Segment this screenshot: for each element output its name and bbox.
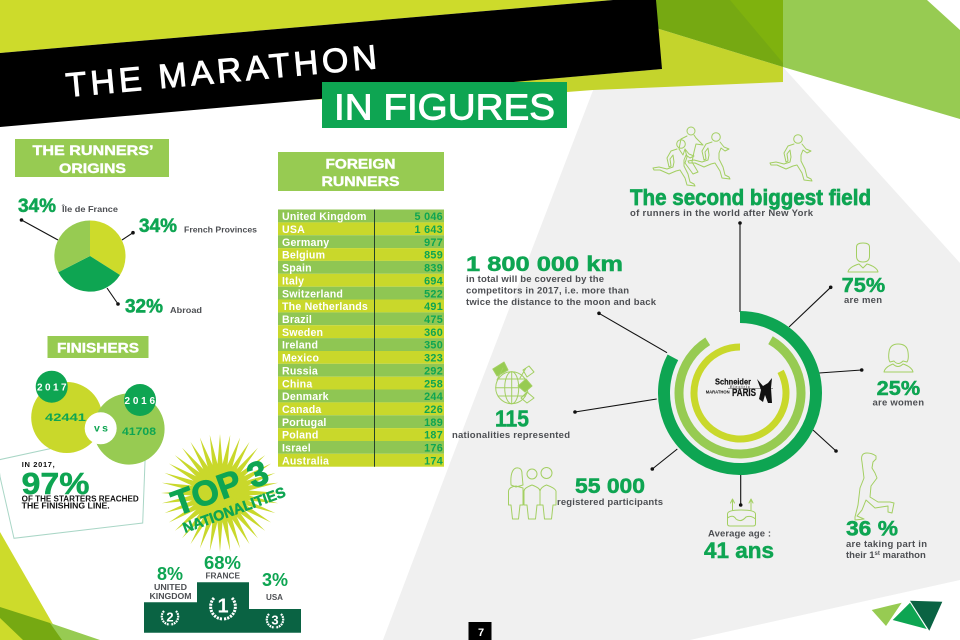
table: foreign runners by country: 323 [424,353,443,365]
table: foreign runners by country: 5 046 [414,211,443,223]
finishers comparison circles: vs [94,423,108,435]
heading: the second biggest field: of runners in the world after New York [630,208,814,219]
stat: men: are men [844,295,882,306]
stat: distance: in total will be covered by the [466,274,604,285]
pie label: ile de france [18,196,118,240]
table: foreign runners by country: 189 [424,417,443,429]
table: foreign runners by country: Australia [282,455,329,467]
podium label: usa: USA [266,593,283,602]
table: foreign runners by country: 176 [424,443,443,455]
title: the marathon: THE MARATHON [64,38,378,105]
table: foreign runners by country: 1 643 [414,224,443,236]
heading: the second biggest field [630,185,871,219]
stat: distance [466,253,657,308]
badge text: nationalities: NATIONALITIES [181,485,288,537]
table: foreign runners by country: The Netherlands [282,301,368,313]
stat: 97 percent finishers: IN 2017, [22,460,55,469]
pie label: abroad: Abroad [170,305,202,315]
table: foreign runners by country: 226 [424,404,443,416]
pie label: ile de france: Île de France [61,203,118,214]
finishers comparison circles [31,371,165,465]
icon: female runner [855,453,894,520]
bottom-left decorative shapes [0,532,100,640]
heading: foreign runners: RUNNERS [322,174,400,189]
stat: nationalities [452,406,570,441]
table: foreign runners by country: Denmark [282,391,329,403]
icon: birthday cake [728,499,756,526]
marathon logo [706,377,773,403]
top decorative shapes [0,0,960,119]
stat: nationalities: 115 [495,406,529,432]
table: foreign runners by country: 522 [424,288,443,300]
stat: first marathon: their 1 [846,550,875,561]
table: foreign runners by country: 174 [424,455,443,467]
table: foreign runners by country [278,210,444,467]
pie label: french provinces: French Provinces [184,224,257,234]
table: foreign runners by country: Ireland [282,340,318,352]
table: foreign runners by country: Sweden [282,327,323,339]
podium [144,582,301,633]
table: foreign runners by country: USA [282,224,305,236]
stat: women [872,378,924,409]
stat: women: 25% [877,378,920,400]
heading: the second biggest field: The second biggest field [630,185,871,210]
stat: average age: Average age : [708,529,771,540]
table: foreign runners by country: 694 [424,275,443,287]
pie label: french provinces [122,216,257,240]
table: foreign runners by country: 475 [424,314,443,326]
corner logo triangles [872,601,942,631]
heading: the runners' origins: ORIGINS [59,161,126,176]
stat: 97 percent finishers: OF THE STARTERS REACHED [22,495,139,504]
stat: first marathon: 36 % [846,518,898,541]
page number: 7 [478,627,484,639]
table: foreign runners by country: Italy [282,275,304,287]
stat: participants: 55 000 [575,475,645,498]
stat: first marathon: are taking part in [846,539,927,550]
stat: 97 percent finishers: 97% [22,466,90,501]
table: foreign runners by country: Canada [282,404,321,416]
stat: first marathon: marathon [880,550,926,561]
icon: man [848,243,878,272]
stat: men [842,275,885,306]
page number [468,622,492,640]
table: foreign runners by country: Mexico [282,353,319,365]
icon: group of runners [653,127,730,186]
heading: finishers: FINISHERS [57,339,139,355]
table: foreign runners by country: 244 [424,391,443,403]
stat: 97 percent finishers [22,460,139,510]
podium label: united kingdom: UNITED [154,583,187,592]
concentric ring chart [664,317,816,469]
icon: globe with flags [493,362,534,404]
icon: single runner [770,135,812,181]
icon: woman [884,344,913,372]
table: foreign runners by country: Israel [282,443,311,455]
table: foreign runners by country: United Kingdom [282,211,367,223]
table: foreign runners by country: 859 [424,250,443,262]
podium: 2 [166,610,174,624]
marathon logo: Electric [730,385,750,389]
grey background panel [383,67,960,640]
table: foreign runners by country: Switzerland [282,288,343,300]
pie label: abroad: 32% [125,297,163,318]
stat: distance: 1 800 000 km [466,253,623,276]
podium label: usa: 3% [262,570,288,590]
finishers comparison circles: 42441 [45,412,86,424]
title banner [0,0,662,127]
table: foreign runners by country: 350 [424,340,443,352]
table: foreign runners by country: 491 [424,301,443,313]
stat: participants: registered participants [557,497,663,508]
subtitle: in figures: IN FIGURES [334,86,555,128]
stat: women: are women [872,398,924,409]
stat: average age: 41 ans [704,538,774,563]
podium: 3 [271,612,279,628]
marathon logo: Schneider [715,377,751,386]
finishers comparison circles: 2017 [37,383,67,394]
stat: distance: twice the distance to the moon and back [466,297,657,308]
connector lines [573,221,864,507]
podium: 1 [217,596,229,618]
badge text: top 3: TOP 3 [166,453,274,524]
podium label: usa [262,570,288,602]
table: foreign runners by country: 292 [424,365,443,377]
icon: group of participants [508,468,556,519]
table: foreign runners by country: Belgium [282,250,325,262]
table: foreign runners by country: 977 [424,237,443,249]
table: foreign runners by country: Poland [282,430,319,442]
pie label: french provinces: 34% [139,216,177,237]
heading: finishers [48,336,148,358]
pie label: ile de france: 34% [18,196,56,217]
podium label: united kingdom [150,564,192,601]
heading: the runners' origins: THE RUNNERS’ [32,143,154,158]
podium label: united kingdom: KINGDOM [150,592,192,601]
stat: distance: competitors in 2017, i.e. more than [466,286,629,296]
table: foreign runners by country: 187 [424,430,443,442]
stat: first marathon: st [875,551,880,557]
pie label: abroad [107,288,202,318]
podium label: france: 68% [204,553,241,573]
table: foreign runners by country: 360 [424,327,443,339]
table: foreign runners by country: Russia [282,365,318,377]
table: foreign runners by country: 839 [424,262,443,274]
finishers comparison circles: 2016 [124,396,155,407]
starburst badge [161,434,279,552]
table: foreign runners by country: 258 [424,378,443,390]
podium label: france: FRANCE [206,571,241,580]
table: foreign runners by country: Brazil [282,314,312,326]
table: foreign runners by country: Portugal [282,417,327,429]
podium label: united kingdom: 8% [157,564,183,584]
stat: men: 75% [842,275,885,297]
table: foreign runners by country: Germany [282,237,329,249]
heading: the runners' origins [15,139,169,177]
table: foreign runners by country: China [282,378,312,390]
heading: foreign runners: FOREIGN [326,156,396,172]
finishers comparison circles: 41708 [122,426,156,438]
stat: 97 percent finishers: THE FINISHING LINE. [22,501,110,510]
stat: first marathon [846,518,927,561]
marathon logo: PARIS [732,387,756,399]
pie chart: origins [54,220,126,292]
table: foreign runners by country: Spain [282,262,312,274]
callout frame: 97 percent [0,428,145,538]
heading: foreign runners [278,152,444,191]
stat: nationalities: nationalities represented [452,430,570,441]
marathon logo: MARATHON [706,390,730,394]
stat: participants [557,475,663,508]
